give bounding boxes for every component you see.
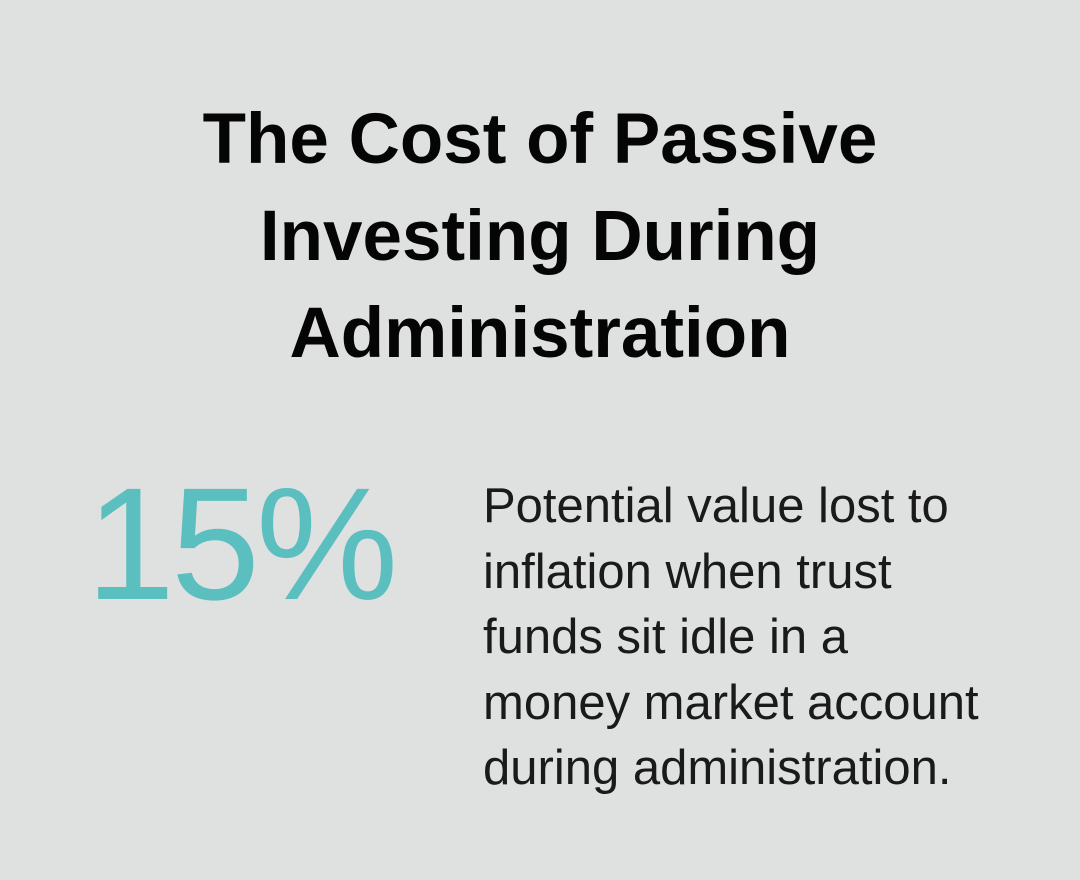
title: The Cost of Passive xyxy=(203,100,877,179)
description text: Potential value lost to xyxy=(483,479,949,533)
description text: during administration. xyxy=(483,741,951,795)
description text: inflation when trust xyxy=(483,544,892,598)
title xyxy=(203,100,877,373)
description text: money market account xyxy=(483,676,979,730)
description text: funds sit idle in a xyxy=(483,610,848,664)
statistic: 15%: 15% xyxy=(86,454,394,633)
title: Administration xyxy=(290,294,790,373)
description text xyxy=(483,479,979,795)
title: Investing During xyxy=(260,197,820,276)
